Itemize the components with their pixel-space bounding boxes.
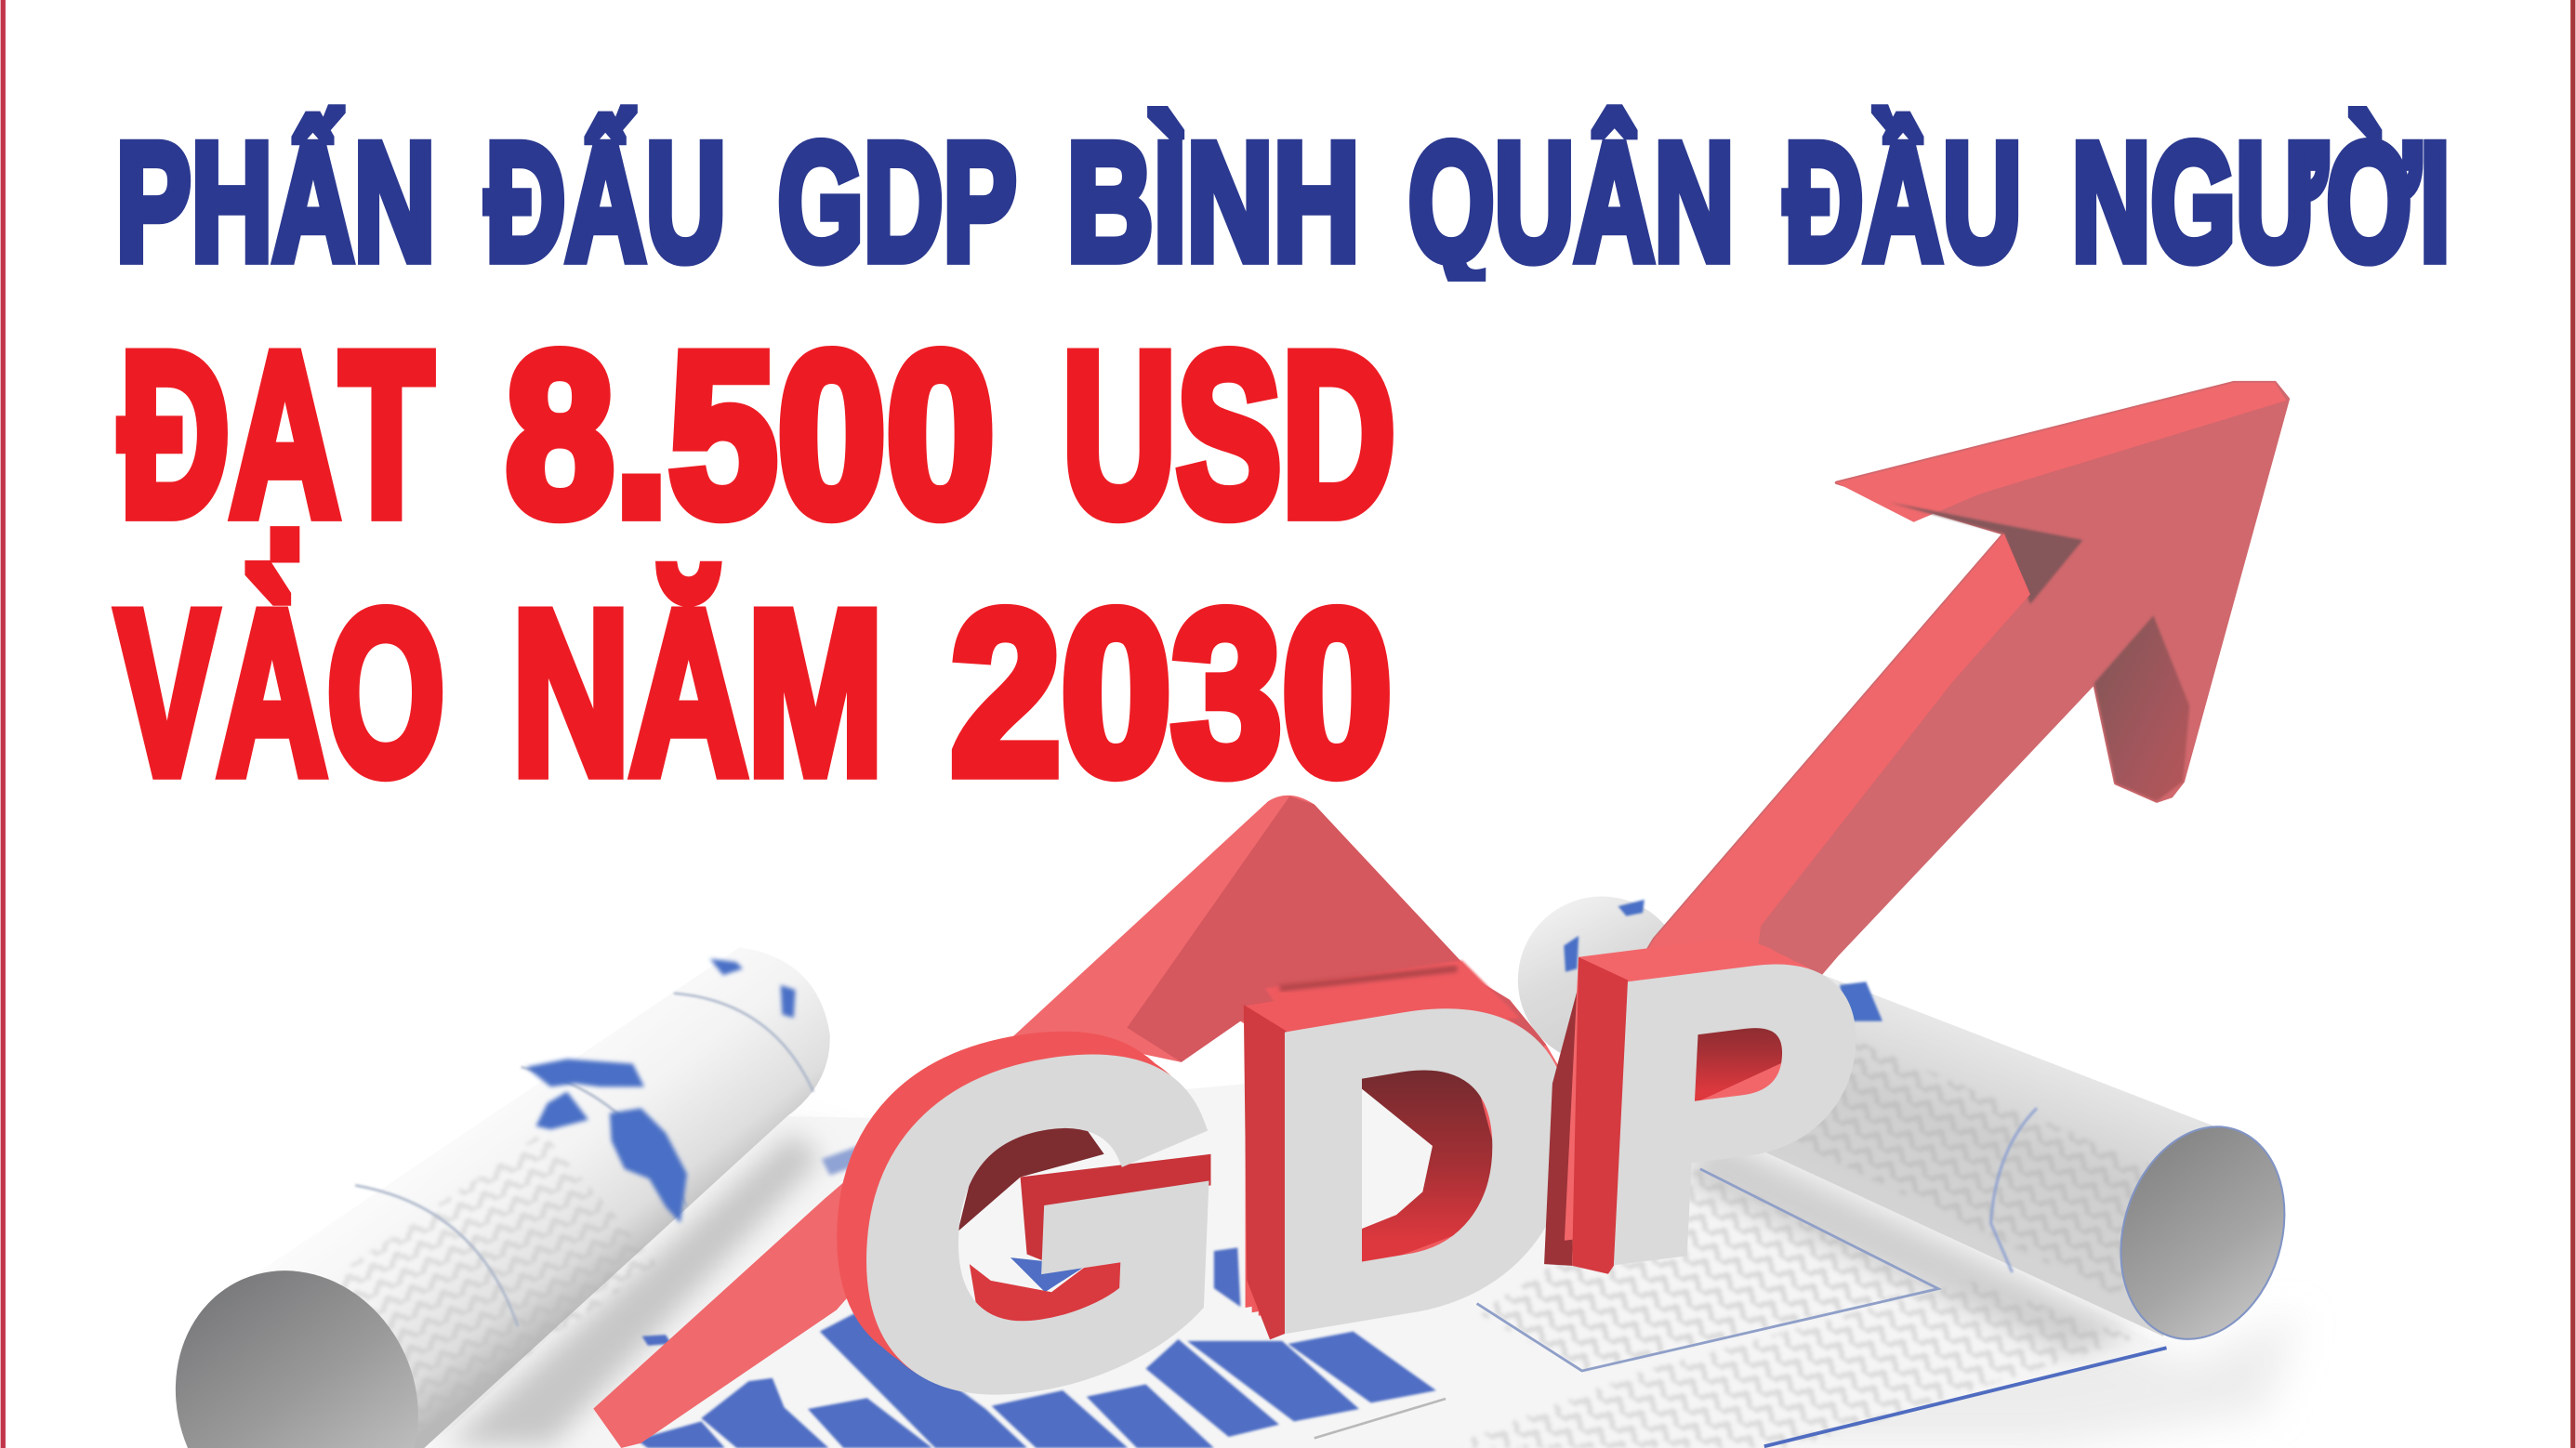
title line 3: target year: VÀO bbox=[116, 562, 444, 823]
right border bbox=[2570, 0, 2575, 1448]
title line 3: target year: NĂM bbox=[512, 562, 883, 823]
paper sheet bbox=[430, 1116, 2167, 1448]
letter P: P bbox=[1553, 859, 1827, 1320]
letter P: P bbox=[1562, 862, 1835, 1323]
title bbox=[116, 108, 2451, 823]
D counter seen through the letter bbox=[1355, 1059, 1495, 1272]
title: USD bbox=[1063, 304, 1395, 564]
title line 2: target value: 8.500 bbox=[506, 304, 995, 564]
title line 1: BÌNH bbox=[1066, 109, 1360, 296]
letter D: D bbox=[1255, 893, 1576, 1416]
letter P: P bbox=[1586, 875, 1859, 1336]
left paper roll bbox=[176, 947, 830, 1448]
letter D: D bbox=[1235, 880, 1555, 1403]
title: 2030 bbox=[950, 562, 1393, 823]
back roll end bbox=[1518, 896, 1685, 1064]
letter D: D bbox=[1262, 899, 1582, 1421]
illustration: GDP growth scene bbox=[176, 383, 2310, 1448]
G counter seen through the letter bbox=[953, 1084, 1248, 1346]
3D letters GDP bbox=[819, 854, 1868, 1448]
roll opening bbox=[2095, 1106, 2310, 1360]
letter D: D bbox=[1242, 885, 1562, 1408]
title line 1: GDP bbox=[778, 109, 1017, 296]
right paper roll bbox=[1741, 968, 2310, 1360]
letter D: D bbox=[1248, 890, 1569, 1413]
letter D: D bbox=[1222, 872, 1542, 1395]
title line 1: PHẤN bbox=[116, 108, 435, 296]
soft floor shadows bbox=[411, 1133, 2300, 1448]
P counter seen through the letter bbox=[1684, 994, 1790, 1108]
arrow head and shaft bbox=[1577, 383, 2288, 1067]
title line 1: ĐẤU bbox=[485, 108, 726, 296]
title line 2: target value: ĐẠT bbox=[120, 304, 433, 564]
title line 1 bbox=[116, 108, 2451, 296]
letter P: P bbox=[1545, 854, 1818, 1315]
letter P: P bbox=[1578, 871, 1851, 1332]
arrow rising band and peak bbox=[593, 796, 1569, 1448]
letter P: P bbox=[1569, 867, 1843, 1328]
zigzag growth arrow bbox=[593, 383, 2288, 1448]
letter P: P bbox=[1594, 878, 1868, 1339]
blue bar chart bbox=[636, 1247, 1436, 1448]
left border bbox=[1, 0, 6, 1448]
world map on roll bbox=[526, 959, 796, 1223]
letter D: D bbox=[1229, 877, 1549, 1400]
roll opening bbox=[176, 1270, 418, 1448]
